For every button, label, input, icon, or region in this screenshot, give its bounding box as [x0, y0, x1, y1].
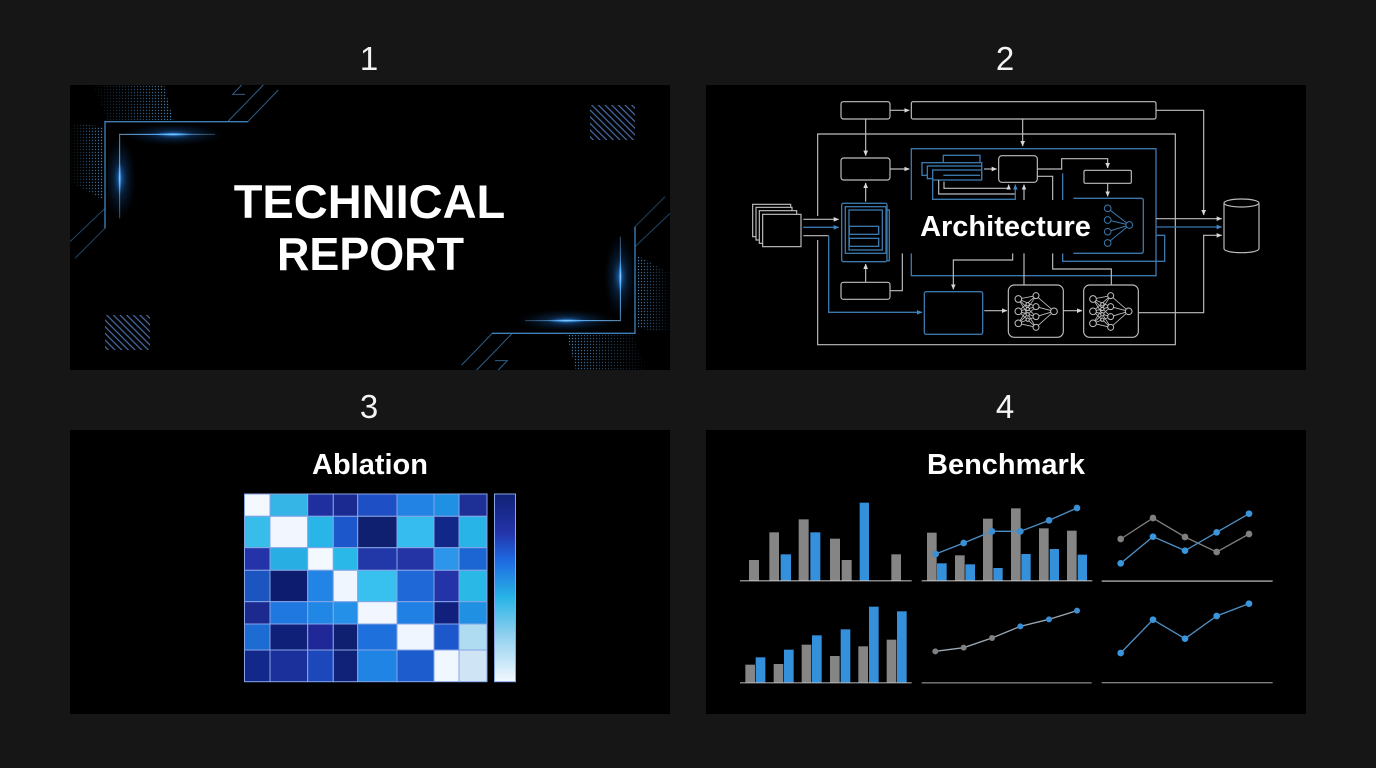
encoder module	[842, 203, 889, 262]
heading: Benchmark: Benchmark	[927, 449, 1086, 481]
connectors under the stack	[944, 182, 1009, 188]
blue stacked layers	[922, 155, 982, 180]
heading: Ablation: Ablation	[312, 449, 428, 481]
bottom left box	[841, 282, 890, 299]
architecture flow diagram	[753, 102, 1259, 345]
number 2: 2	[996, 40, 1014, 77]
combo chart top centre	[922, 505, 1092, 581]
panel: benchmark charts	[706, 430, 1306, 714]
bar chart top left	[740, 503, 912, 581]
output arrows	[1156, 217, 1222, 220]
blue container	[911, 149, 1156, 276]
input document stack	[753, 204, 801, 247]
corner decoration: bottom right circuit lines	[462, 105, 670, 370]
database cylinder	[1224, 199, 1259, 253]
blue network panel	[1073, 198, 1143, 253]
top long box	[911, 102, 1156, 119]
neural network box 2	[1084, 285, 1138, 337]
bar chart bottom left	[740, 607, 912, 683]
line chart top right	[1102, 510, 1273, 582]
line chart bottom right	[1102, 600, 1273, 683]
connectors from top row	[890, 109, 909, 112]
neural network box 1	[1008, 285, 1063, 337]
chart group left and centre	[740, 503, 1092, 683]
chart group right	[1102, 510, 1273, 683]
number 3: 3	[360, 388, 378, 425]
panel: technical report title slide	[70, 85, 670, 370]
corner decoration: top left circuit lines	[70, 85, 278, 350]
panel: architecture diagram	[706, 85, 1306, 370]
outer loop line	[818, 134, 1175, 345]
line chart bottom centre	[922, 608, 1092, 683]
number 4: 4	[996, 388, 1014, 425]
heatmap	[244, 494, 487, 682]
heading: Architecture: Architecture	[920, 211, 1091, 243]
central small box	[999, 156, 1037, 182]
number 1: 1	[360, 40, 378, 77]
second row left box	[841, 158, 890, 180]
blue bottom box	[924, 292, 983, 334]
title second line: REPORT	[277, 228, 464, 280]
input arrows	[803, 218, 839, 221]
right small box	[1084, 170, 1131, 183]
panel: ablation heatmap	[70, 430, 670, 714]
top left box	[841, 102, 890, 119]
colour scale bar	[494, 494, 516, 682]
title: TECHNICAL	[234, 175, 505, 228]
